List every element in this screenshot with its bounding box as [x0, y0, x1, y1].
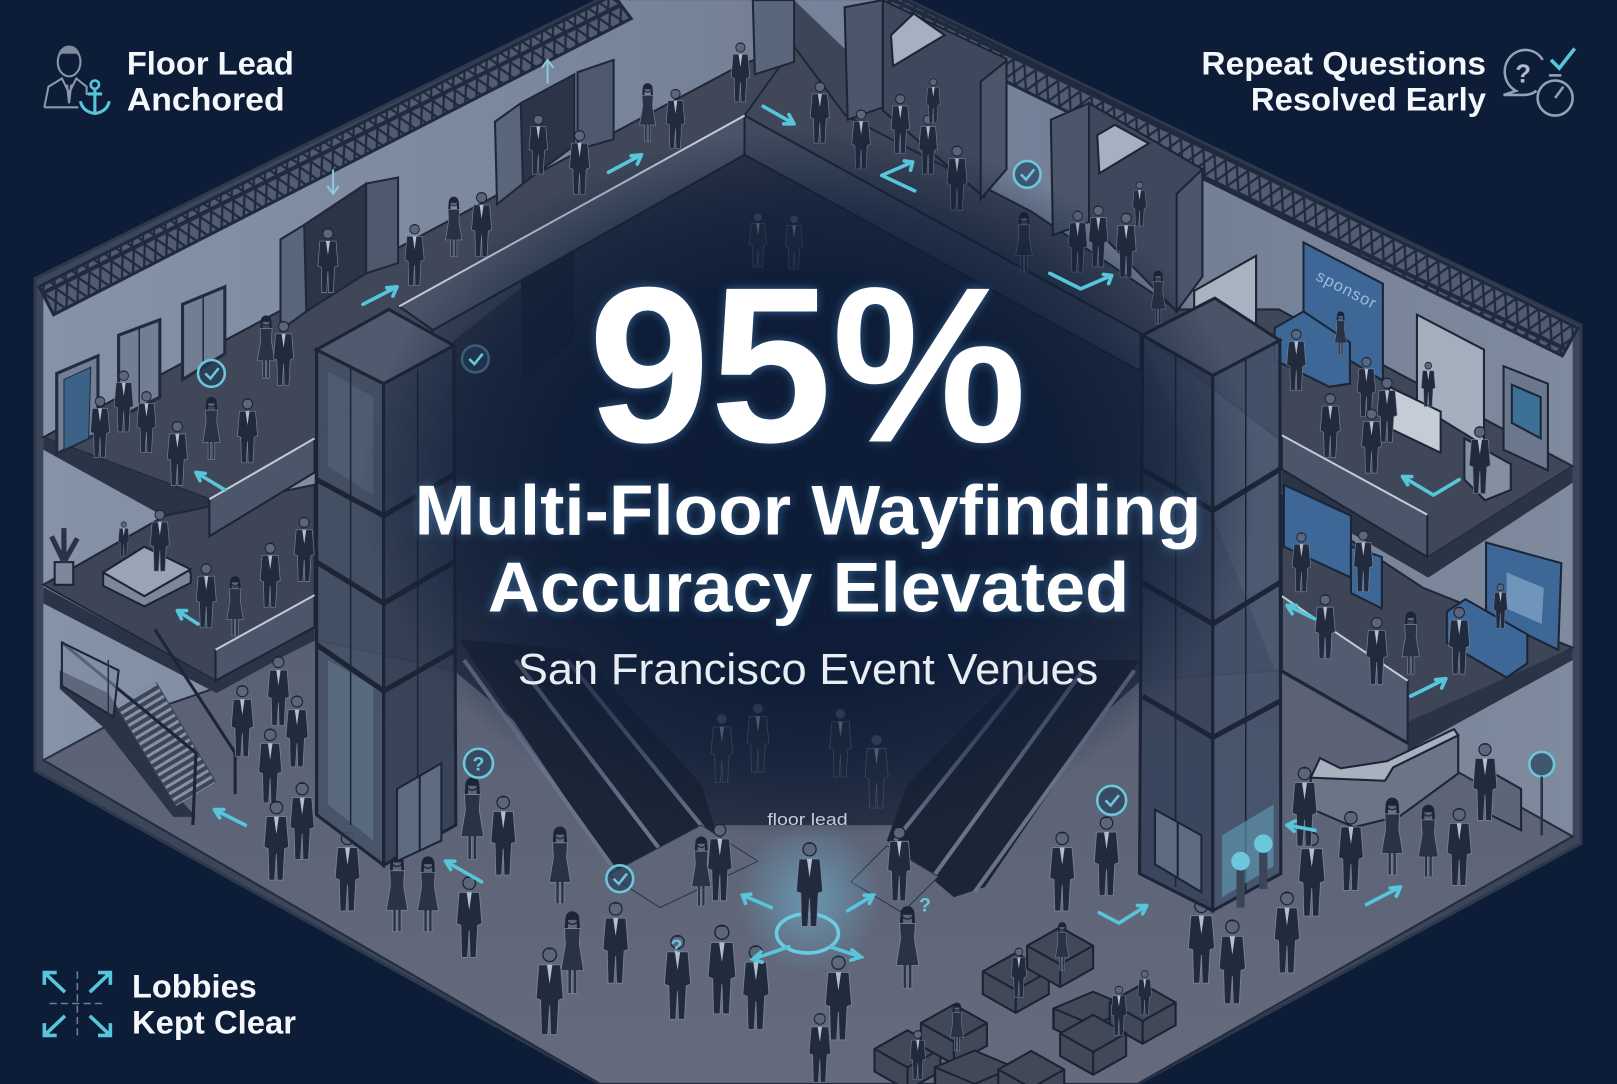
sponsor booths mid right: [1284, 485, 1561, 678]
corner label: lobbies kept clear: [44, 968, 296, 1040]
truss: left: [39, 0, 631, 315]
people: upper floor: [90, 43, 1490, 494]
escalators right: [851, 660, 1140, 913]
label text: [132, 968, 296, 1040]
lounge seating: [874, 923, 1176, 1084]
staircase: [43, 629, 235, 825]
subheading: San Francisco Event Venues: [518, 646, 1098, 694]
upper floor left: [43, 46, 794, 499]
question glyph: ?: [1515, 61, 1531, 89]
label text: [127, 45, 294, 117]
label text: Resolved Early: [1251, 81, 1486, 117]
elevator tower left: [317, 309, 456, 865]
sponsor banner text: sponsor: [1313, 267, 1380, 313]
atrium ghost door: [521, 248, 574, 382]
right upper floor edge slab: [1282, 466, 1573, 578]
label text: Lobbies: [132, 968, 257, 1004]
label text: Anchored: [127, 81, 285, 117]
atrium void: [454, 116, 1141, 825]
ghost figures below the headline: [711, 213, 888, 808]
status badges: [198, 161, 1554, 892]
icon: person with anchor: [44, 45, 109, 114]
floor lead marker: [737, 811, 882, 975]
elevators on left wall: [57, 287, 225, 454]
stanchions lobby right: [1231, 834, 1273, 908]
left back wall: [43, 0, 794, 760]
upper floor edge slab: [43, 437, 315, 541]
label text: Kept Clear: [132, 1004, 296, 1040]
elevator tower right: [1140, 298, 1281, 911]
upper floor right: [745, 46, 1573, 557]
escalators left: [459, 639, 758, 908]
headline: wayfinding accuracy: Multi-Floor Wayfinding: [415, 471, 1201, 549]
icon: outward arrows: [44, 972, 110, 1036]
mid floor right slab: [1408, 648, 1573, 751]
reception desk lobby right: [1311, 729, 1521, 830]
icon: question bubble, check and stopwatch: [1504, 49, 1575, 116]
question marks: ?: [473, 753, 484, 775]
mid floor left: [43, 485, 315, 681]
glass railings: [209, 116, 1427, 743]
desk and plant mid left: [52, 528, 191, 606]
label text: Floor Lead: [127, 45, 294, 81]
ground floor: [43, 619, 1573, 1084]
doors upper left: [280, 0, 794, 330]
central dark vignette: [361, 129, 1258, 841]
label text: Repeat Questions: [1201, 45, 1486, 81]
label text: [1201, 45, 1486, 117]
headline: wayfinding accuracy: [415, 471, 1201, 627]
mid floor left slab: [43, 587, 315, 693]
right back wall: [794, 0, 1573, 836]
breakout rooms: [845, 0, 1202, 312]
corner label: repeat questions: [1201, 45, 1575, 117]
wayfinding arrows: [177, 60, 1459, 923]
truss: right: [877, 0, 1578, 356]
people: mid floor: [118, 510, 1507, 684]
people: lobby: [231, 657, 1497, 1082]
headline: 95%: 95%: [588, 240, 1027, 488]
mid floor right: [1282, 495, 1573, 743]
sponsor booths upper right: [1194, 242, 1548, 500]
corner label: floor lead anchored: [44, 45, 294, 117]
question marks: ?: [671, 936, 682, 958]
question marks: ?: [919, 895, 931, 917]
floor lead label: floor lead: [767, 811, 848, 829]
question marks: [473, 753, 931, 958]
headline: wayfinding accuracy: Accuracy Elevated: [488, 549, 1129, 627]
